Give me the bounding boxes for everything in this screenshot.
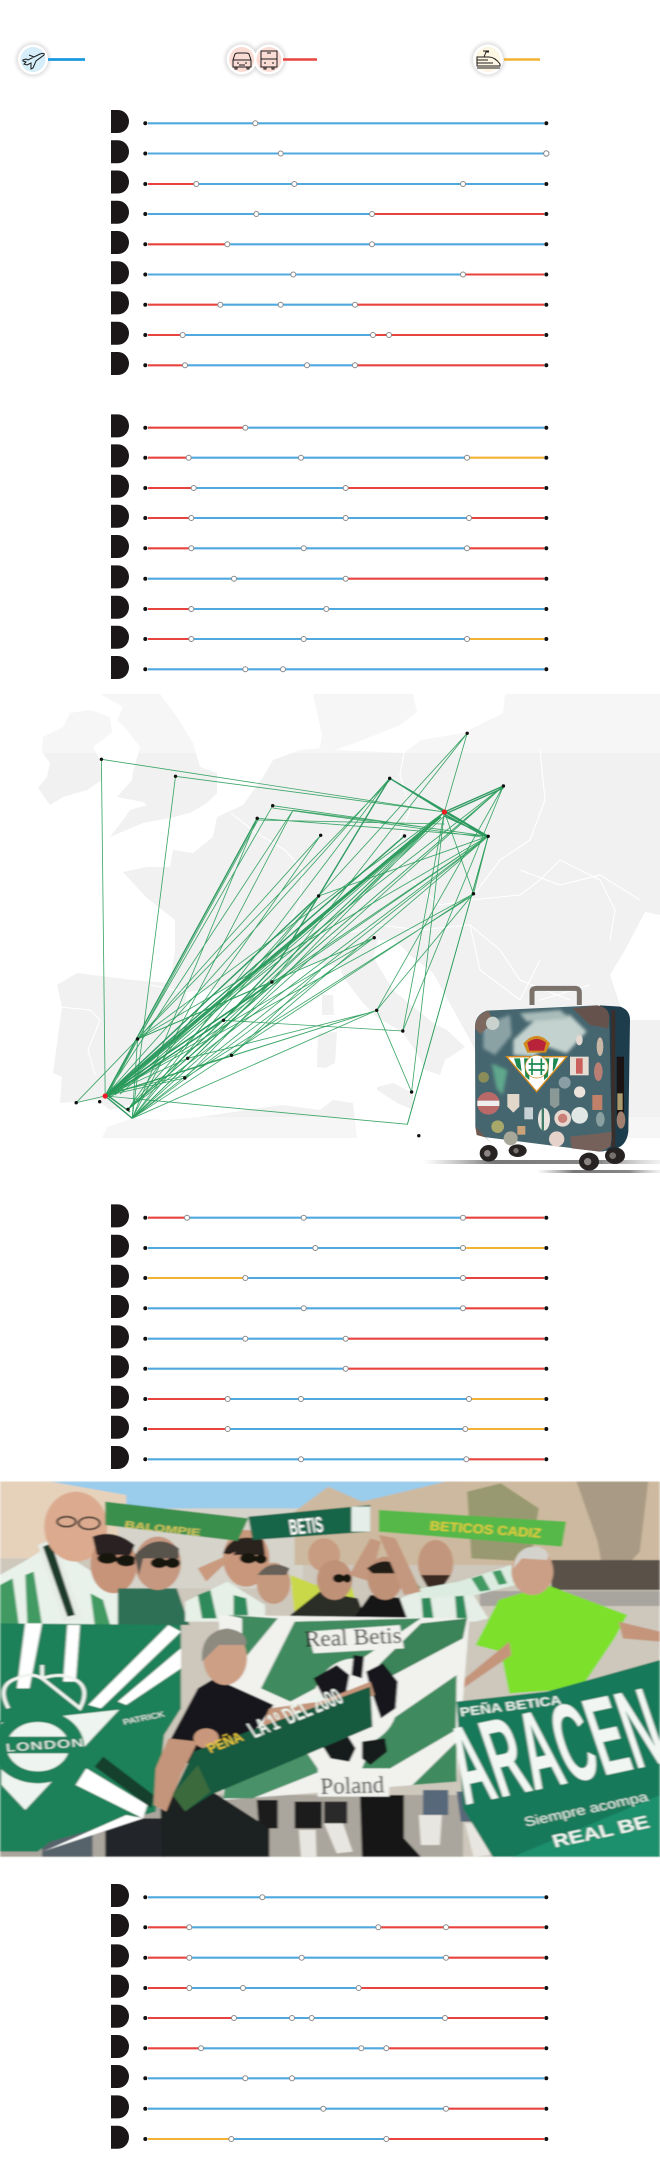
country borders (60, 750, 640, 1075)
legend: road transport (222, 40, 317, 80)
timetable list 1 (111, 110, 549, 375)
scarf: Betis: BETIS (287, 1512, 325, 1540)
crown (4, 1665, 84, 1708)
legend: train transport (468, 40, 540, 80)
route row 2-5 (111, 535, 548, 558)
route row 3-4 (111, 1295, 548, 1318)
route row 3-2 (111, 1235, 548, 1258)
banner: Real Betis Poland: Poland (320, 1772, 385, 1800)
icon: train (477, 51, 500, 68)
route row 2-9 (111, 656, 548, 679)
map of Europe with routes (0, 694, 660, 1138)
lighter bands (0, 694, 660, 753)
route row 3-3 (111, 1265, 548, 1288)
route row 3-6 (111, 1355, 548, 1378)
scarf: Beticos Cadiz: BETICOS CADIZ (429, 1518, 543, 1541)
banner: Real Betis Poland: Real Betis (304, 1622, 402, 1652)
icon: car (233, 53, 251, 69)
scarf: Betis (248, 1505, 370, 1540)
route row 4-2 (111, 1914, 548, 1937)
seas (490, 912, 660, 1138)
banner: Aracena: PEÑA BETICA (458, 1691, 563, 1719)
city nodes (74, 732, 505, 1137)
route row 1-4 (111, 201, 548, 224)
route row 1-6 (111, 261, 548, 284)
scarf: Balompie: BALOMPIE (124, 1519, 201, 1538)
route row 4-1 (111, 1884, 548, 1907)
route row 4-8 (111, 2095, 548, 2118)
kneeling fan (154, 1628, 375, 1857)
route row 4-3 (111, 1944, 548, 1967)
route row 2-4 (111, 505, 548, 528)
route row 4-7 (111, 2065, 548, 2088)
crest (507, 1036, 567, 1092)
wheels (480, 1144, 625, 1171)
route row 2-3 (111, 475, 548, 498)
banner: Real Betis Poland (219, 1615, 469, 1800)
route row 3-1 (111, 1204, 548, 1227)
banner: Aracena: REAL BE (550, 1812, 652, 1852)
highlighted cities (103, 809, 447, 1099)
route row 4-4 (111, 1975, 548, 1998)
scarf: Beticos Cadiz (379, 1510, 566, 1547)
route row 2-1 (111, 414, 548, 437)
route row 3-8 (111, 1416, 548, 1439)
route row 1-5 (111, 231, 548, 254)
land background (38, 694, 660, 1138)
route row 3-5 (111, 1325, 548, 1348)
legend: plane transport (13, 40, 85, 80)
man in green shirt (461, 1547, 660, 1693)
route lines (76, 733, 503, 1124)
banner: Aracena: Siempre acompa (522, 1789, 651, 1830)
route row 1-7 (111, 291, 548, 314)
route row 1-1 (111, 110, 548, 133)
route row 4-9 (111, 2126, 548, 2149)
mottled world map (483, 1010, 587, 1095)
route row 3-9 (111, 1446, 548, 1469)
route row 1-2 (111, 140, 549, 163)
route row 4-6 (111, 2035, 548, 2058)
scarf: Balompie (105, 1502, 248, 1541)
standing fans' legs and shoes (42, 1790, 490, 1857)
route row 4-5 (111, 2005, 548, 2028)
timetable list 2 (111, 414, 548, 679)
timetable list 3 (111, 1204, 548, 1469)
banner: London peña: PATRICK (122, 1710, 166, 1727)
photo: Betis fans with banners (0, 1482, 660, 1857)
fans group (0, 1492, 516, 1625)
scarf: La 1 del 2000: PEÑA (203, 1728, 246, 1756)
route row 2-2 (111, 444, 548, 467)
eagle (314, 1655, 398, 1718)
scarf: La 1 del 2000 (173, 1684, 372, 1812)
route row 1-8 (111, 322, 548, 345)
route row 1-3 (111, 170, 548, 194)
timetable list 4 (111, 1884, 548, 2149)
banner: London peña: LONDON (5, 1736, 85, 1754)
sky and buildings (0, 1482, 660, 1857)
route row 2-8 (111, 626, 548, 649)
route row 1-9 (111, 352, 548, 375)
icon: plane (23, 53, 44, 69)
route row 3-7 (111, 1386, 548, 1409)
stickers (477, 1017, 625, 1147)
illustration: suitcase with Betis crest (423, 988, 660, 1173)
scarf: La 1 del 2000: LA 1º DEL 2000 (243, 1684, 348, 1744)
icon: bus (261, 51, 277, 69)
route row 2-6 (111, 565, 548, 588)
banner: London peña (0, 1623, 181, 1852)
route row 2-7 (111, 596, 548, 619)
